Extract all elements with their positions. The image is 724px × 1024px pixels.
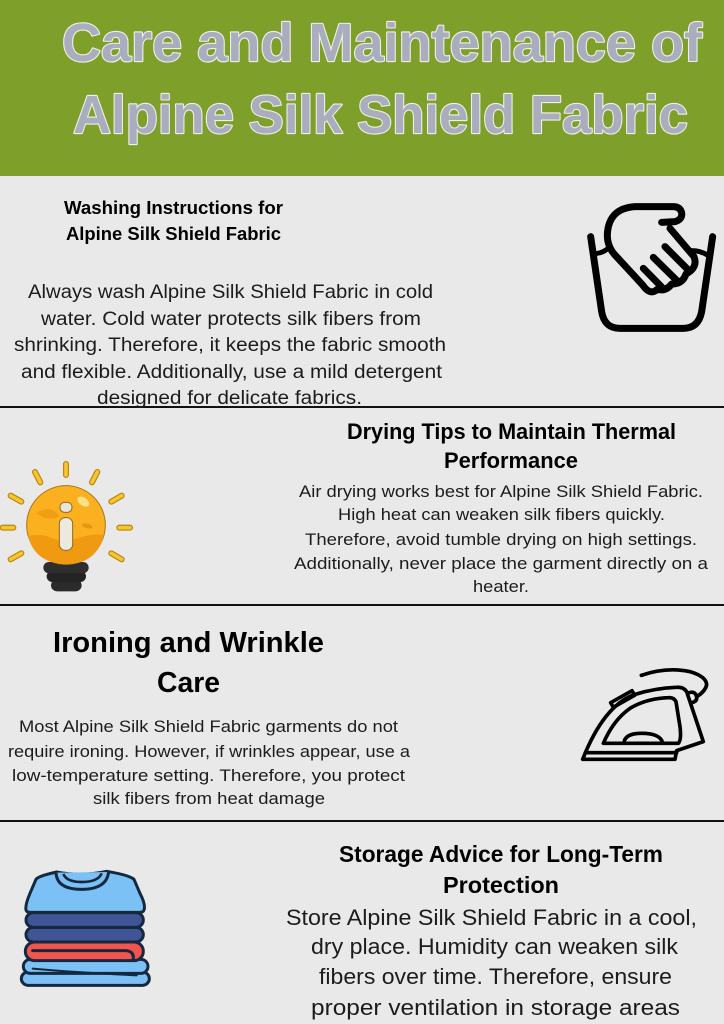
heading: ironing (53, 627, 324, 699)
heading: washing: Washing Instructions for (64, 197, 283, 218)
icon: iron (583, 670, 707, 759)
header banner (0, 0, 724, 176)
heading: storage: Storage Advice for Long-Term (339, 841, 663, 867)
heading: drying: Drying Tips to Maintain Thermal (347, 419, 676, 444)
text: drying body: Air drying works best for Alpine Silk Shield Fabric. (299, 483, 703, 501)
text: ironing body: require ironing. However, if wrinkles appear, use a (8, 743, 411, 761)
text: drying body: High heat can weaken silk fibers quickly. (338, 506, 665, 524)
text: storage body: dry place. Humidity can weaken silk (311, 934, 679, 959)
text: storage body: proper ventilation in storage areas (311, 995, 680, 1020)
text: storage body (286, 905, 697, 1020)
heading: washing (64, 197, 283, 244)
heading: ironing: Care (157, 667, 220, 699)
heading: ironing: Ironing and Wrinkle (53, 627, 324, 659)
heading: storage (339, 841, 663, 898)
icon: light bulb (3, 464, 130, 591)
heading: drying: Performance (444, 448, 578, 473)
panel: ironing (8, 627, 707, 808)
text: washing body: designed for delicate fabrics. (97, 388, 362, 409)
text: washing body: Always wash Alpine Silk Shield Fabric in cold (28, 282, 433, 303)
text: washing body (14, 282, 446, 409)
panel: washing instructions (14, 197, 713, 409)
text: washing body: shrinking. Therefore, it keeps the fabric smooth (14, 335, 446, 356)
text: ironing body: low-temperature setting. Therefore, you protect (12, 767, 405, 785)
panel: storage advice (21, 841, 697, 1020)
text: washing body: and flexible. Additionally, use a mild detergent (21, 362, 443, 383)
heading: washing: Alpine Silk Shield Fabric (66, 223, 281, 244)
icon: hand wash basin (591, 207, 713, 328)
text: washing body: water. Cold water protects silk fibers from (40, 309, 421, 330)
text: ironing body (8, 718, 411, 808)
heading: drying (347, 419, 676, 473)
text: drying body: Additionally, never place the garment directly on a (294, 555, 709, 573)
text: ironing body: Most Alpine Silk Shield Fabric garments do not (19, 718, 398, 736)
text: ironing body: silk fibers from heat damage (93, 790, 325, 808)
title (62, 13, 703, 145)
text: storage body: Store Alpine Silk Shield Fabric in a cool, (286, 905, 697, 930)
text: storage body: fibers over time. Therefore, ensure (319, 964, 672, 989)
text: drying body: Therefore, avoid tumble drying on high settings. (305, 531, 697, 549)
text: drying body (294, 483, 709, 596)
title: Alpine Silk Shield Fabric (73, 85, 688, 145)
title: Care and Maintenance of (62, 13, 703, 73)
panel: drying tips (3, 419, 709, 596)
text: drying body: heater. (473, 578, 529, 596)
icon: folded clothes stack (21, 871, 149, 985)
heading: storage: Protection (443, 872, 559, 898)
